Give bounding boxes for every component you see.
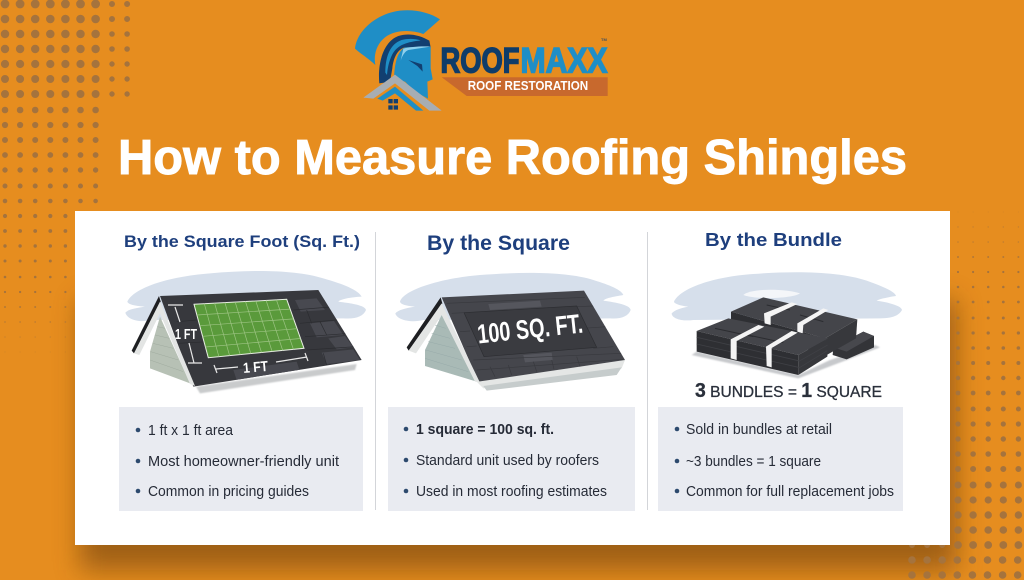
- wordmark MAXX: MAXX: [520, 42, 608, 80]
- illustration: roof with one-foot grid: [125, 271, 366, 393]
- halftone dots: top left: [5, 4, 130, 352]
- logo: Roof Maxx Roof Restoration: [355, 10, 608, 111]
- roof surface: [160, 290, 362, 387]
- front stack: [697, 318, 828, 355]
- white card: [75, 211, 950, 545]
- illustration: shingle bundles: [672, 272, 902, 378]
- trademark: TM: [601, 37, 607, 42]
- illustration: roof labelled 100 sq. ft.: [395, 273, 631, 391]
- dimension: vertical 1 ft: 1 FT: [175, 327, 197, 343]
- bullet list: bundle: Sold in bundles at retail: [686, 421, 832, 438]
- dimension: vertical 1 ft: [168, 305, 202, 363]
- bullet list: square foot: [119, 407, 363, 511]
- back straps: [764, 302, 797, 325]
- title: How to Measure Roofing Shingles: [118, 131, 907, 185]
- bullet list: square foot: Common in pricing guides: [148, 483, 309, 500]
- panel: by the square foot: [119, 233, 366, 511]
- card shadow: [80, 300, 956, 570]
- panel: by the bundle: [658, 229, 903, 511]
- gable trim: [407, 297, 442, 351]
- bullet list: square: [388, 407, 635, 511]
- heading: by the square: By the Square: [427, 232, 570, 255]
- heading: by the square foot: By the Square Foot (Sq. Ft.): [124, 233, 360, 251]
- label: 100 sq. ft.: 100 SQ. FT.: [476, 309, 584, 349]
- back stack: [731, 297, 857, 338]
- panel: by the square: [388, 232, 635, 511]
- bullet list: bundle: Common for full replacement jobs: [686, 483, 894, 500]
- wall: [425, 315, 477, 382]
- bullet list: square: Used in most roofing estimates: [416, 483, 607, 500]
- gable trim: [132, 296, 161, 353]
- bullet list: square foot: Most homeowner-friendly unit: [148, 453, 340, 470]
- ground shadow: [692, 345, 880, 378]
- icon: spartan helmet and house roof: [355, 10, 442, 111]
- cloud backdrop: [395, 273, 631, 321]
- roof surface: [442, 291, 625, 382]
- halftone dots: bottom right: [912, 212, 1024, 575]
- bullet list: square: Standard unit used by roofers: [416, 452, 599, 469]
- dimension: horizontal 1 ft: [214, 353, 308, 377]
- dimension: horizontal 1 ft: 1 FT: [242, 359, 269, 377]
- bullet list: bundle: ~3 bundles = 1 square: [686, 453, 821, 470]
- wall: [150, 317, 190, 383]
- ground shadow: [196, 364, 357, 393]
- label: 3 bundles = 1 square: 3 BUNDLES = 1 SQUARE: [695, 380, 882, 402]
- small rear stack: [833, 332, 874, 359]
- ribbon: roof restoration: [442, 77, 608, 96]
- eave strip: [477, 360, 625, 388]
- heading: by the bundle: By the Bundle: [705, 229, 842, 250]
- wordmark ROOF: ROOF: [440, 42, 520, 80]
- bullet list: bundle: [658, 407, 903, 511]
- bullet list: square foot: 1 ft x 1 ft area: [148, 422, 234, 439]
- front straps: [731, 325, 764, 360]
- cloud backdrop: [125, 271, 366, 321]
- green one-foot grid: [194, 299, 304, 358]
- ribbon: roof restoration: ROOF RESTORATION: [468, 79, 588, 93]
- bullet list: square: 1 square = 100 sq. ft.: [416, 421, 554, 438]
- cloud backdrop: [672, 272, 902, 320]
- central shingle panel: [464, 306, 597, 357]
